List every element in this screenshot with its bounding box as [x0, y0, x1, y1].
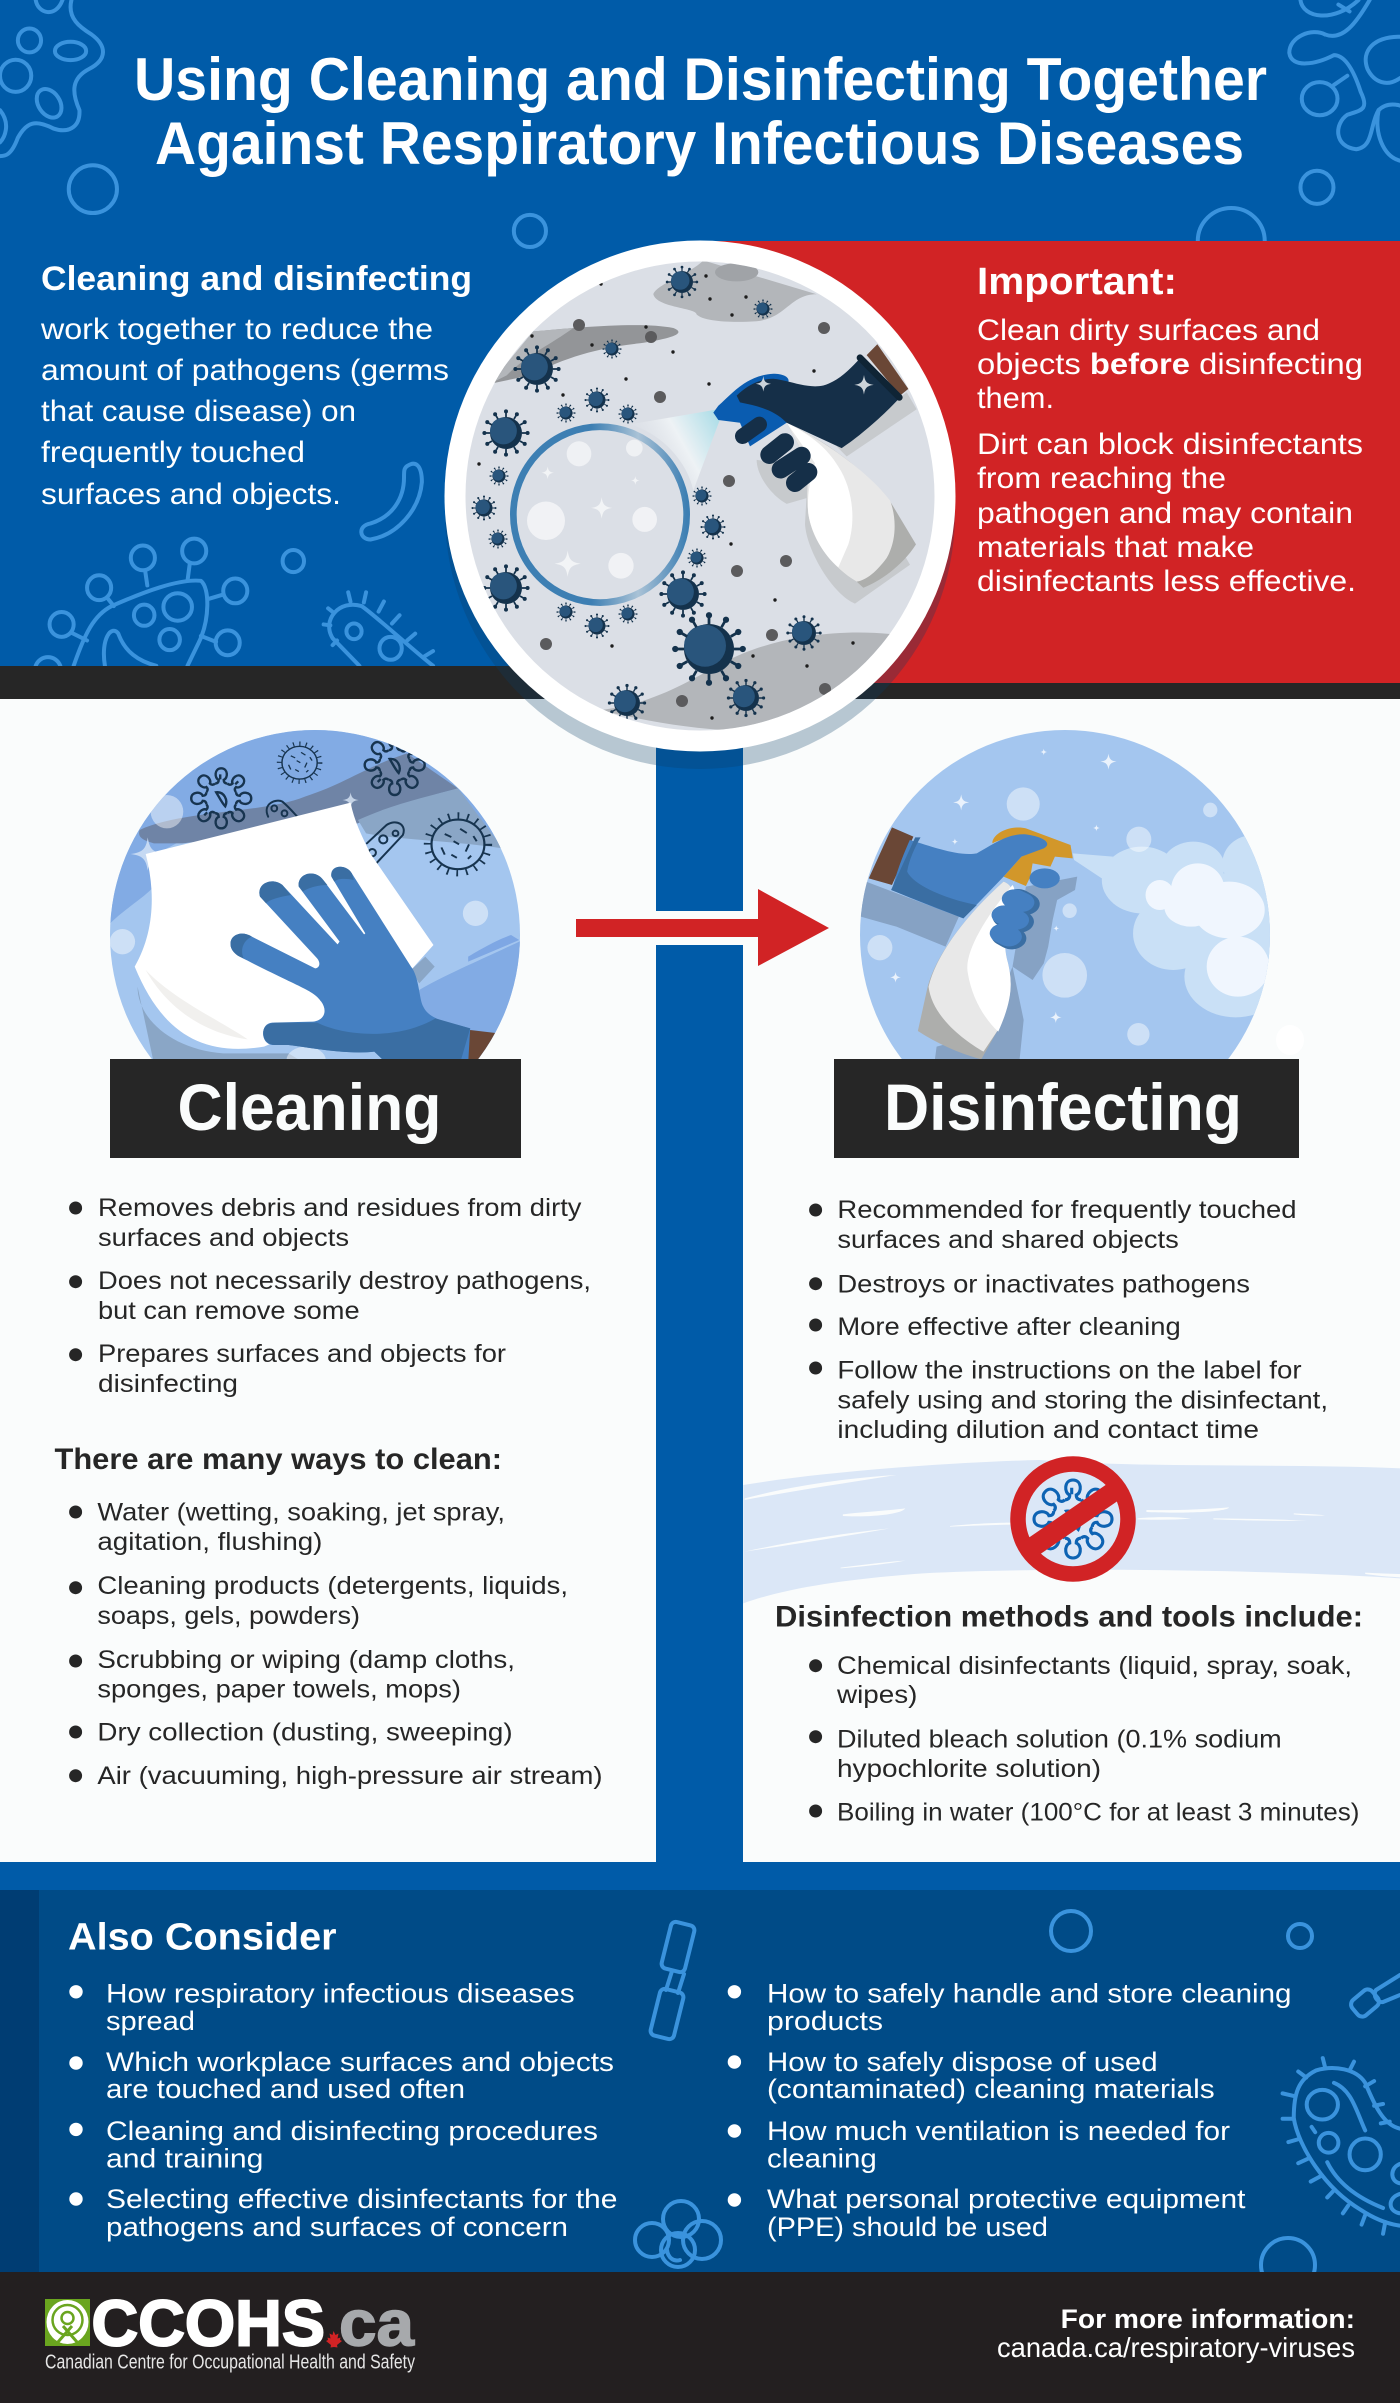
list: what disinfecting does	[809, 1196, 1328, 1444]
stray bubble	[1276, 1025, 1304, 1055]
list: ways to clean: soaps, gels, powders)	[97, 1602, 360, 1630]
title: Using Cleaning and Disinfecting Together	[134, 46, 1267, 113]
bottle	[918, 882, 1012, 1059]
list: also consider right column: How to safely dispose of used	[767, 2047, 1158, 2077]
list: ways to clean: Scrubbing or wiping (damp cloths,	[97, 1646, 515, 1674]
main illustration: surface being sprayed	[444, 240, 956, 752]
blue centre column	[656, 699, 743, 1891]
list: what disinfecting does: More effective after cleaning	[837, 1313, 1181, 1341]
list: also consider right column: How to safely handle and store cleaning	[767, 1979, 1292, 2009]
list: also consider right column: (PPE) should be used	[767, 2212, 1048, 2242]
shadows	[861, 880, 959, 947]
heading: cleaning: Cleaning	[178, 1070, 442, 1144]
text block: cleaning and disinfecting intro: surfaces and objects.	[41, 478, 341, 511]
viruses	[473, 267, 820, 721]
list: what cleaning does: Prepares surfaces and objects for	[98, 1340, 506, 1368]
list: also consider right column: How much ventilation is needed for	[767, 2116, 1230, 2146]
list: what cleaning does: but can remove some	[98, 1297, 360, 1325]
list: what disinfecting does: Destroys or inactivates pathogens	[837, 1270, 1250, 1298]
logo: CCOHS: CCOHS	[92, 2286, 325, 2360]
smudge top	[653, 260, 817, 322]
text block: important: pathogen and may contain	[977, 497, 1353, 530]
text block: important	[977, 261, 1363, 598]
heading: cleaning	[110, 1059, 521, 1158]
clean spot	[513, 427, 687, 603]
title: Against Respiratory Infectious Diseases	[155, 110, 1244, 177]
bottle and hand shadow	[805, 494, 910, 604]
list: what cleaning does: disinfecting	[98, 1370, 238, 1398]
list: what disinfecting does: Follow the instructions on the label for	[837, 1357, 1302, 1385]
decorative pathogen outlines top right	[1198, 0, 1400, 274]
header background	[0, 0, 1400, 700]
list: also consider left column: How respiratory infectious diseases	[106, 1979, 575, 2009]
list: disinfection methods: Boiling in water (100°C for at least 3 minutes)	[837, 1799, 1359, 1827]
illustration: gloved hand wiping surface	[110, 730, 520, 1059]
list: what disinfecting does: Recommended for frequently touched	[837, 1196, 1297, 1224]
heading: disinfecting: Disinfecting	[884, 1070, 1242, 1144]
text block: important: Dirt can block disinfectants	[977, 428, 1363, 461]
bubbles	[867, 787, 1217, 1046]
text block: cleaning and disinfecting intro: that cause disease) on	[41, 395, 356, 428]
main circle shadow	[445, 259, 955, 769]
list: also consider right column: (contaminated) cleaning materials	[767, 2074, 1215, 2104]
spray cone	[650, 410, 720, 490]
illustration: gloved hand with spray bottle	[860, 730, 1270, 1059]
list: what cleaning does	[69, 1194, 591, 1398]
decorative pathogen outlines bottom	[635, 1911, 1400, 2292]
list: ways to clean: Air (vacuuming, high-pressure air stream)	[97, 1762, 603, 1790]
glove	[231, 867, 470, 1063]
wrist	[468, 1030, 495, 1059]
list: ways to clean	[69, 1499, 603, 1790]
text block: for more information	[997, 2304, 1355, 2363]
list: disinfection methods: hypochlorite solution)	[837, 1755, 1101, 1783]
list: what cleaning does: Removes debris and residues from dirty	[98, 1194, 582, 1222]
list: disinfection methods: Diluted bleach solution (0.1% sodium	[837, 1726, 1282, 1754]
text block: important: from reaching the	[977, 462, 1226, 495]
text block: important: materials that make	[977, 531, 1254, 564]
text block: important: objects before disinfecting	[977, 348, 1363, 381]
arrow: cleaning to disinfecting	[576, 889, 829, 966]
list: disinfection methods: Chemical disinfectants (liquid, spray, soak,	[837, 1652, 1352, 1680]
list: disinfection methods: wipes)	[836, 1681, 917, 1709]
dirt particles	[540, 319, 831, 707]
list: also consider right column	[728, 1979, 1292, 2242]
list: ways to clean: Dry collection (dusting, sweeping)	[97, 1719, 513, 1747]
list: also consider right column: products	[767, 2006, 883, 2036]
list: also consider left column: Cleaning and disinfecting procedures	[106, 2116, 598, 2146]
heading: disinfection methods: Disinfection methods and tools include:	[775, 1601, 1363, 1634]
list: what cleaning does: Does not necessarily destroy pathogens,	[98, 1267, 591, 1295]
spray and cloud	[1073, 835, 1287, 1017]
decorative pathogen outlines top left	[0, 0, 546, 666]
text block: for more information: canada.ca/respiratory-viruses	[997, 2332, 1355, 2363]
list: also consider right column: cleaning	[767, 2144, 877, 2174]
panel: important red background	[700, 241, 1400, 683]
list: also consider left column: and training	[106, 2144, 263, 2174]
list: also consider left column: pathogens and surfaces of concern	[106, 2212, 568, 2242]
trigger	[713, 374, 789, 446]
footer background	[0, 2272, 1400, 2403]
list: also consider left column: Which workplace surfaces and objects	[106, 2047, 614, 2077]
text block: cleaning and disinfecting intro: amount of pathogens (germs	[41, 354, 449, 387]
logo: CCOHS: ca	[339, 2286, 415, 2360]
text block: important: disinfectants less effective.	[977, 565, 1356, 598]
list: ways to clean: agitation, flushing)	[97, 1528, 322, 1556]
text block: for more information: For more information:	[1061, 2304, 1355, 2334]
glove	[892, 834, 1047, 918]
trigger	[992, 827, 1073, 886]
list: also consider left column: spread	[106, 2006, 195, 2036]
wrist	[867, 344, 908, 396]
fingers	[1029, 868, 1060, 888]
list: also consider left column: are touched and used often	[106, 2074, 465, 2104]
text block: important: them.	[977, 382, 1054, 415]
icon: prohibited pathogen	[1018, 1464, 1128, 1574]
list: what disinfecting does: including dilution and contact time	[837, 1416, 1259, 1444]
text block: cleaning and disinfecting intro: work together to reduce the	[40, 313, 433, 346]
list: what disinfecting does: surfaces and shared objects	[837, 1226, 1179, 1254]
smudge bottom	[600, 632, 900, 731]
viruses	[191, 735, 425, 828]
heading: also consider: Also Consider	[68, 1916, 337, 1958]
list: what disinfecting does: safely using and storing the disinfectant,	[837, 1386, 1328, 1414]
list: also consider left column	[69, 1979, 617, 2242]
list: disinfection methods	[809, 1652, 1359, 1827]
list: also consider right column: What personal protective equipment	[767, 2184, 1246, 2214]
bottle	[787, 423, 916, 588]
list: also consider left column: Selecting effective disinfectants for the	[106, 2184, 617, 2214]
cloth	[135, 803, 433, 1049]
heading: ways to clean: There are many ways to clean:	[54, 1443, 502, 1476]
glove	[737, 358, 902, 448]
text block: cleaning and disinfecting intro	[40, 260, 472, 511]
title	[134, 46, 1267, 177]
list: ways to clean: sponges, paper towels, mops)	[97, 1676, 461, 1704]
list: ways to clean: Cleaning products (detergents, liquids,	[97, 1572, 568, 1600]
bubbles	[110, 795, 488, 1073]
brush stroke background	[743, 1460, 1400, 1603]
heading: disinfecting	[834, 1059, 1299, 1158]
text block: cleaning and disinfecting intro: frequently touched	[41, 436, 305, 469]
text block: important: Clean dirty surfaces and	[977, 314, 1320, 347]
list: ways to clean: Water (wetting, soaking, jet spray,	[97, 1499, 505, 1527]
dark band below header	[0, 666, 1400, 699]
panel: also consider background	[0, 1862, 1400, 2272]
wrist	[869, 827, 913, 885]
logo: CCOHS: Canadian Centre for Occupational Health and Safety	[45, 2352, 415, 2374]
list: what cleaning does: surfaces and objects	[98, 1224, 349, 1252]
text block: important: Important:	[977, 261, 1177, 303]
logo: CCOHS	[45, 2286, 415, 2374]
white content panels	[0, 699, 1400, 1862]
text block: cleaning and disinfecting intro: Cleaning and disinfecting	[41, 260, 472, 298]
